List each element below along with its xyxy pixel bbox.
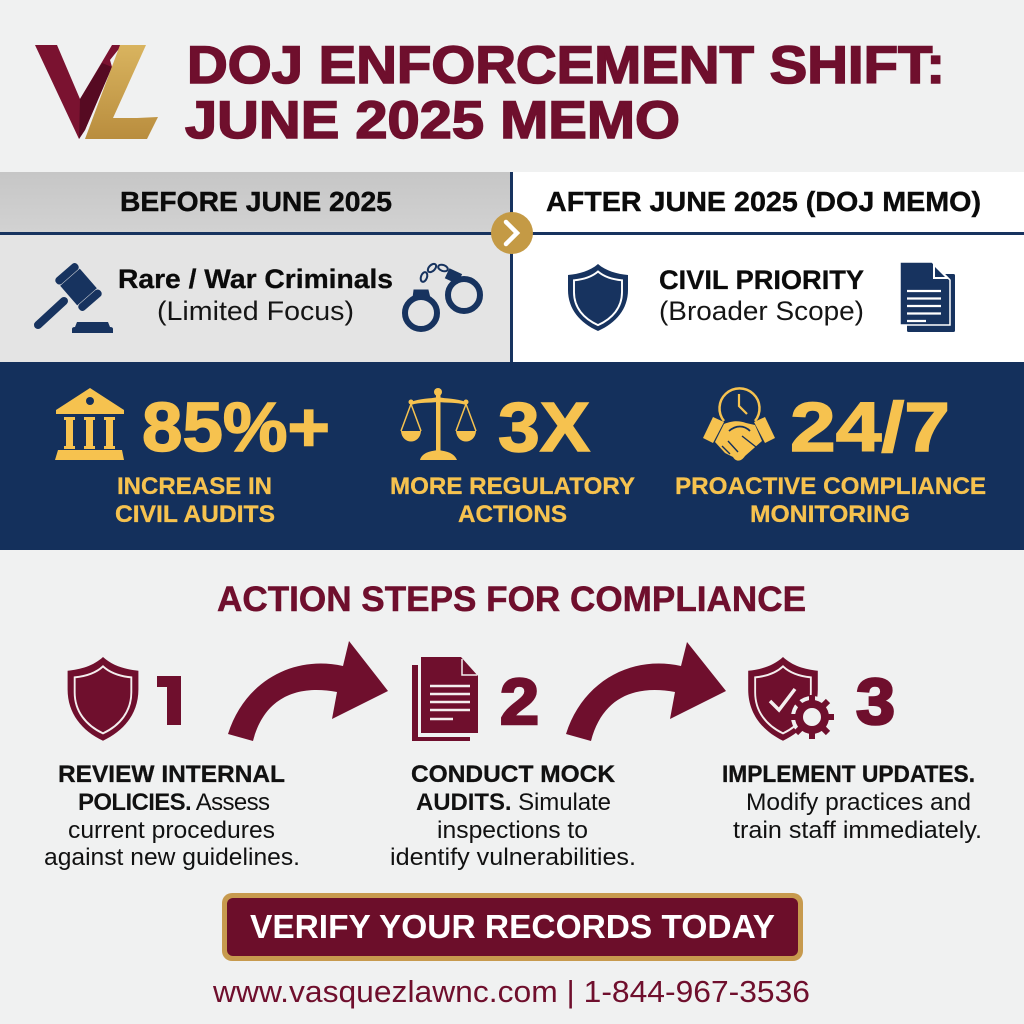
stat: 3X — [390, 388, 635, 528]
after text: (Broader Scope) — [659, 296, 864, 326]
number 2: 2 — [500, 665, 539, 738]
icon: clock and handshake — [703, 388, 775, 461]
step 3 text: train staff immediately. — [733, 817, 982, 844]
step 1 text: current procedures — [68, 817, 275, 844]
heading: action steps: ACTION STEPS FOR COMPLIANCE — [217, 580, 806, 619]
after text: CIVIL PRIORITY — [659, 265, 864, 295]
icon: gavel — [38, 262, 113, 333]
caption: INCREASE IN — [117, 473, 272, 500]
after text — [659, 265, 864, 326]
icon: handcuffs — [405, 262, 480, 329]
caption — [675, 473, 986, 528]
before text: Rare / War Criminals — [118, 264, 393, 294]
step 3 text: IMPLEMENT UPDATES. — [722, 761, 975, 788]
button: verify your records — [222, 893, 803, 961]
panel: statistics band — [0, 362, 1024, 550]
caption — [115, 473, 275, 528]
step 2 — [390, 657, 636, 871]
number: 24/7 — [790, 388, 950, 466]
icon: document stack — [412, 657, 478, 741]
step 3 text: Modify practices and — [746, 789, 971, 816]
number: 3X — [498, 388, 590, 466]
stat: 85% — [55, 388, 330, 528]
title: JUNE 2025 MEMO — [185, 91, 680, 150]
step 2 text: identify vulnerabilities. — [390, 844, 636, 871]
icon: gold chevron button — [491, 212, 533, 254]
step 2 text — [390, 761, 636, 871]
step 1 text: POLICIES. Assess — [78, 789, 270, 816]
number 3: 3 — [856, 665, 895, 738]
before text: (Limited Focus) — [157, 296, 354, 326]
number 1 — [157, 676, 181, 725]
logo: VL monogram — [35, 45, 158, 139]
caption: ACTIONS — [458, 501, 567, 528]
icon: scales of justice — [401, 388, 476, 460]
step 1 text: REVIEW INTERNAL — [58, 761, 285, 788]
before body — [0, 235, 510, 362]
icon: shield with gear — [748, 657, 834, 741]
caption: CIVIL AUDITS — [115, 501, 275, 528]
step 3 text — [722, 761, 982, 844]
panel: after June 2025 — [513, 172, 1024, 362]
before text — [118, 264, 393, 326]
before header — [0, 172, 510, 232]
arrow: step 1 to step 2 — [228, 641, 388, 741]
number: 85%+ — [142, 388, 330, 466]
button: verify your records: VERIFY YOUR RECORDS TODAY — [250, 908, 775, 945]
divider lines — [0, 172, 1024, 362]
arrow: step 2 to step 3 — [566, 642, 726, 741]
icon: document — [900, 262, 955, 332]
step 3 — [722, 657, 982, 844]
after header text: AFTER JUNE 2025 (DOJ MEMO) — [546, 186, 981, 217]
before header: BEFORE JUNE 2025 — [120, 186, 392, 217]
title — [185, 36, 945, 150]
band background — [0, 362, 1024, 550]
title: DOJ ENFORCEMENT SHIFT: — [187, 36, 945, 95]
footer: website and phone: www.vasquezlawnc.com | 1-844-967-3536 — [212, 974, 810, 1009]
step 1 text: against new guidelines. — [44, 844, 300, 871]
after background — [513, 172, 1024, 362]
icon: shield — [68, 657, 138, 741]
caption: MONITORING — [750, 501, 910, 528]
step 1 text — [44, 761, 300, 871]
caption: PROACTIVE COMPLIANCE — [675, 473, 986, 500]
panel: before June 2025 — [0, 172, 510, 362]
icon: bank building — [55, 388, 124, 460]
caption — [390, 473, 635, 528]
stat: 24/7 — [675, 388, 986, 528]
step 2 text: AUDITS. Simulate — [416, 789, 611, 816]
step 2 text: CONDUCT MOCK — [411, 761, 616, 788]
icon: shield — [568, 264, 628, 331]
step 1 — [44, 657, 300, 871]
step 2 text: inspections to — [437, 817, 588, 844]
caption: MORE REGULATORY — [390, 473, 635, 500]
